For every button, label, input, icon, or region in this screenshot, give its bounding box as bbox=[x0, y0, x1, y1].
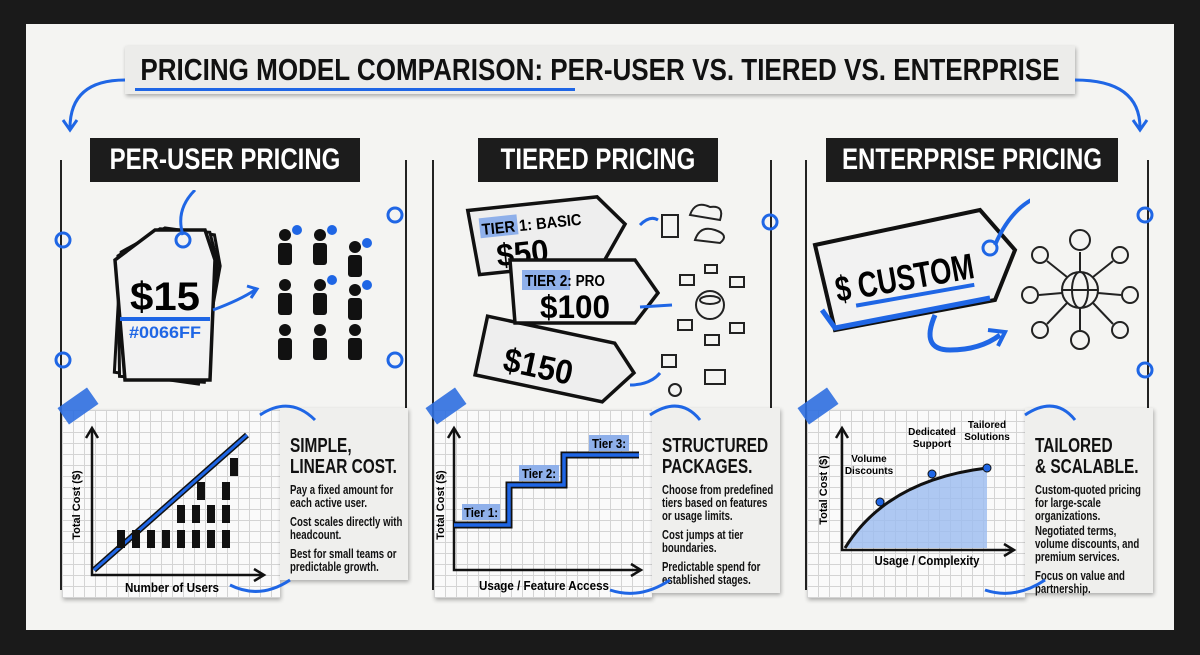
text card: per-user: SIMPLE, bbox=[290, 435, 352, 457]
text card: enterprise: Custom-quoted pricing for large-scale organizations. bbox=[1035, 483, 1141, 523]
header: tiered: TIERED PRICING bbox=[501, 143, 695, 176]
icon: tiered tags: $100 bbox=[540, 289, 610, 325]
chart: enterprise curve: Volume bbox=[851, 454, 887, 465]
text card: per-user bbox=[280, 408, 408, 580]
text card: tiered bbox=[652, 408, 780, 593]
header: enterprise bbox=[826, 138, 1118, 182]
text card: enterprise: Negotiated terms, volume discounts, and premium services. bbox=[1035, 524, 1139, 564]
text card: tiered: Predictable spend for established stages. bbox=[662, 560, 760, 587]
chart: enterprise curve: Usage / Complexity bbox=[874, 553, 980, 568]
text card: enterprise bbox=[1025, 408, 1153, 593]
icon: enterprise network bbox=[1021, 229, 1139, 350]
text card: tiered: STRUCTURED bbox=[662, 435, 768, 457]
icon: per-user price tag: #0066FF bbox=[129, 323, 201, 342]
icon: tiered tags: $150 bbox=[500, 341, 576, 393]
text card: tiered: Choose from predefined tiers based on features or usage limits. bbox=[662, 483, 773, 523]
text card: per-user: Cost scales directly with headcount. bbox=[290, 515, 402, 542]
icon: tiered tags bbox=[466, 195, 660, 404]
icon: tiered tags: $50 bbox=[495, 232, 550, 274]
header: tiered bbox=[478, 138, 718, 182]
text card: per-user: Best for small teams or predictable growth. bbox=[290, 547, 396, 574]
icon: enterprise tag: $ CUSTOM bbox=[832, 245, 977, 310]
icon: user group bbox=[278, 225, 372, 360]
icons: tier features bbox=[630, 204, 745, 397]
chart: tiered steps bbox=[434, 410, 652, 598]
text card: enterprise: Focus on value and partnership. bbox=[1035, 569, 1125, 596]
chart: enterprise curve bbox=[807, 410, 1025, 598]
text card: enterprise: TAILORED bbox=[1035, 435, 1113, 457]
text card: tiered: Cost jumps at tier boundaries. bbox=[662, 528, 743, 555]
icon: per-user price tag: $15 bbox=[130, 275, 200, 319]
chart: enterprise curve: Tailored bbox=[968, 420, 1006, 431]
icon: tiered tags: TIER 2: PRO bbox=[525, 273, 605, 290]
header: enterprise: ENTERPRISE PRICING bbox=[842, 143, 1102, 176]
icon: enterprise tag bbox=[812, 198, 1030, 352]
panel borders bbox=[60, 160, 62, 590]
chart: tiered steps: Total Cost ($) bbox=[435, 470, 447, 540]
title: PRICING MODEL COMPARISON: PER-USER VS. TIERED VS. ENTERPRISE bbox=[140, 52, 1060, 87]
header: per-user: PER-USER PRICING bbox=[110, 143, 340, 176]
text card: per-user: LINEAR COST. bbox=[290, 456, 397, 478]
text card: per-user: Pay a fixed amount for each active user. bbox=[290, 483, 393, 510]
chart: tiered steps: Usage / Feature Access bbox=[479, 578, 609, 593]
chart: enterprise curve: Solutions bbox=[964, 432, 1010, 443]
chart: tiered steps: Tier 1: bbox=[464, 505, 498, 520]
icon: tiered tags: TIER 1: BASIC bbox=[481, 212, 583, 239]
chart: enterprise curve: Discounts bbox=[845, 466, 894, 477]
icon: per-user price tag bbox=[112, 190, 260, 386]
chart: tiered steps: Tier 2: bbox=[522, 466, 556, 481]
text card: enterprise: & SCALABLE. bbox=[1035, 456, 1139, 478]
chart: per-user linear bbox=[62, 410, 280, 598]
text card: tiered: PACKAGES. bbox=[662, 456, 752, 478]
chart: tiered steps: Tier 3: bbox=[592, 436, 626, 451]
chart: per-user linear: Total Cost ($) bbox=[71, 470, 83, 540]
chart: enterprise curve: Dedicated bbox=[908, 427, 956, 438]
chart: enterprise curve: Support bbox=[913, 439, 952, 450]
chart: per-user linear: Number of Users bbox=[125, 580, 219, 595]
chart: enterprise curve: Total Cost ($) bbox=[818, 455, 830, 525]
header: per-user bbox=[90, 138, 360, 182]
